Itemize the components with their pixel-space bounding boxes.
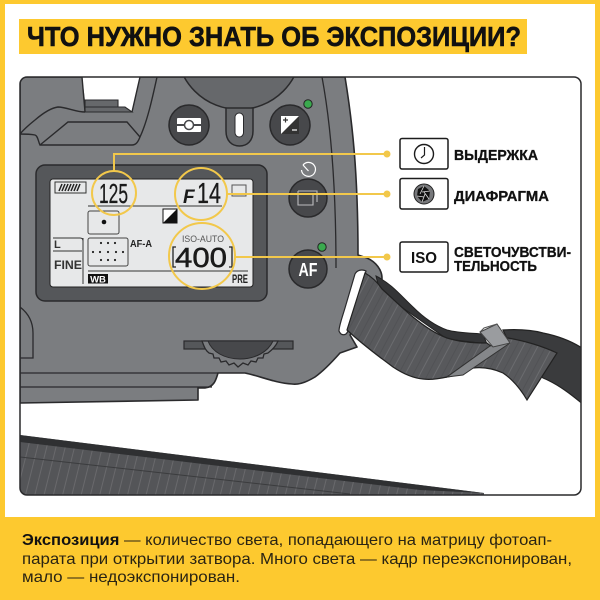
- bottom strap: [20, 435, 484, 500]
- label ISO-AUTO: ISO-AUTO: [182, 234, 224, 245]
- slot switch: [226, 108, 253, 146]
- strap dark band: [376, 276, 487, 344]
- button: exposure compensation: [270, 105, 310, 145]
- panel border: [20, 77, 581, 495]
- timer icon: [302, 162, 315, 176]
- label FINE: FINE: [54, 258, 82, 272]
- bottom band: definition: Экспозиция — количество света, попадающего на матрицу фотоап-: [22, 532, 552, 549]
- strap buckle: [447, 324, 510, 377]
- spot metering box: [88, 211, 119, 234]
- bottom band: definition: парата при открытии затвора. Много света — кадр переэкспонирован,: [22, 551, 572, 568]
- aperture value: [183, 182, 220, 204]
- main strap: [347, 273, 492, 379]
- green indicator top: [304, 100, 312, 108]
- icon box: aperture: [400, 178, 448, 209]
- green indicator AF: [318, 243, 326, 251]
- camera body: [20, 77, 382, 403]
- label PRE: PRE: [232, 274, 248, 286]
- icon box: ISO: [400, 242, 448, 272]
- battery: [55, 182, 86, 193]
- button: drive mode: [289, 179, 327, 217]
- aperture value: 14: [197, 178, 221, 210]
- rear dial: [184, 341, 293, 367]
- label L: L: [54, 239, 61, 251]
- LCD divider: [53, 206, 248, 284]
- top dial: [184, 78, 294, 109]
- shutter value: 125: [99, 178, 128, 209]
- label: sensitivity: [454, 245, 571, 275]
- frame icon: [232, 185, 246, 196]
- body seam lines: [20, 77, 336, 387]
- ISO value: 400: [175, 242, 227, 273]
- LCD housing: [36, 165, 267, 301]
- callout: aperture: [175, 168, 390, 220]
- button: AF: [289, 250, 327, 288]
- panel: camera illustration: [20, 78, 580, 494]
- outer strap end: [447, 338, 557, 400]
- AF grid: [88, 238, 128, 266]
- bottom band: definition: мало — недоэкспонирован.: [22, 569, 240, 586]
- button: AF: AF: [298, 260, 318, 280]
- back strap: [503, 330, 585, 406]
- label: sensitivity: СВЕТОЧУВСТВИ-: [454, 245, 571, 261]
- ISO value: [172, 246, 233, 268]
- label: shutter speed: ВЫДЕРЖКА: [454, 148, 539, 164]
- callout: shutter: [92, 152, 390, 215]
- aperture value: F: [183, 187, 196, 208]
- label AF-A: AF-A: [130, 238, 152, 250]
- strap loop: [339, 270, 366, 335]
- label WB: [88, 274, 108, 284]
- callout lines and circles: [92, 152, 390, 289]
- callout: ISO: [169, 223, 390, 289]
- label: aperture: ДИАФРАГМА: [454, 189, 550, 205]
- viewfinder: [20, 77, 157, 145]
- icon box: clock: [400, 138, 448, 169]
- icon box: ISO: ISO: [411, 250, 437, 267]
- title: ЧТО НУЖНО ЗНАТЬ ОБ ЭКСПОЗИЦИИ?: [27, 21, 521, 52]
- bottom band: definition: [0, 517, 600, 600]
- button: metering: [169, 105, 209, 145]
- label WB: WB: [90, 274, 106, 286]
- label: sensitivity: ТЕЛЬНОСТЬ: [454, 259, 537, 275]
- LCD exposure icon: [163, 209, 177, 223]
- LCD screen: [50, 178, 253, 287]
